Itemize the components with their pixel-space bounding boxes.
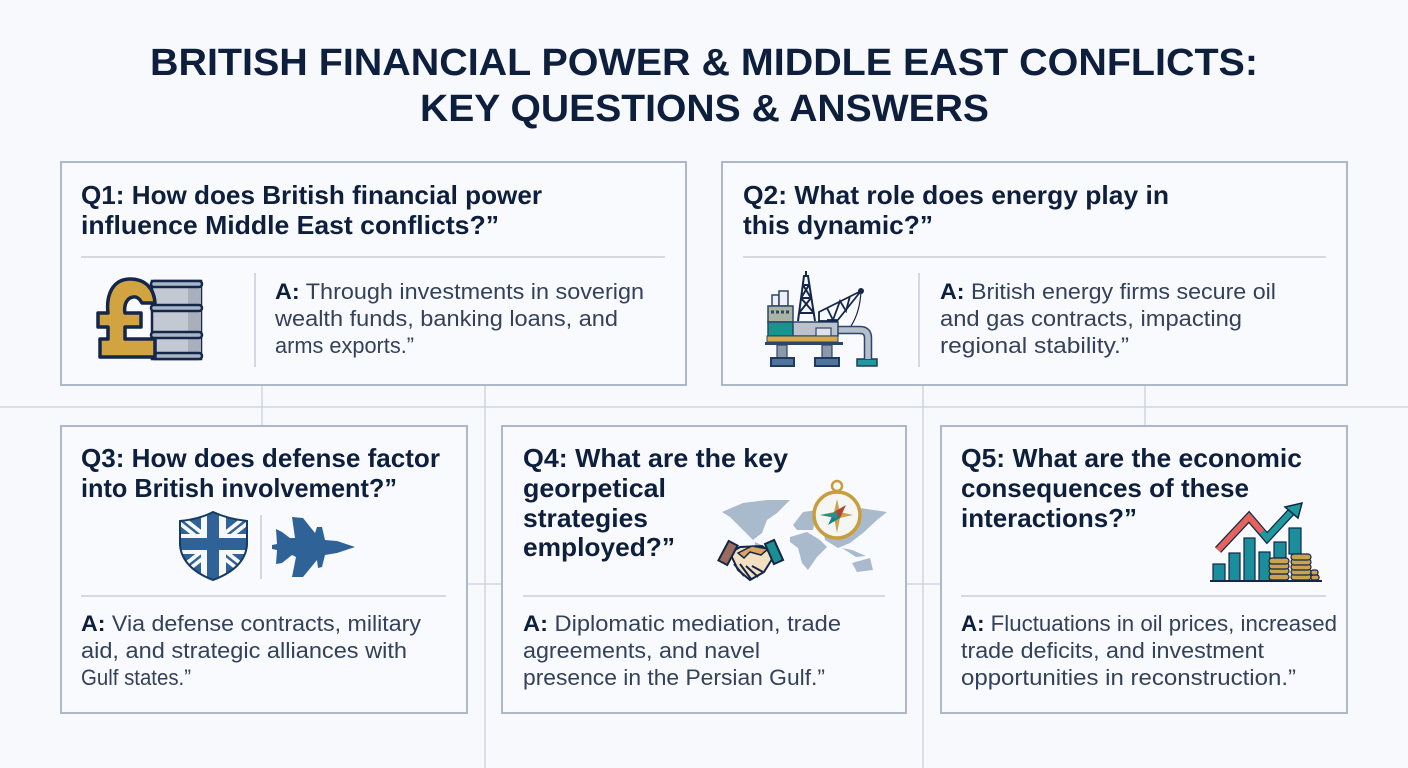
answer 4: A: Diplomatic mediation, trade	[523, 611, 841, 636]
answer 2: and gas contracts, impacting	[940, 306, 1242, 331]
question 4: strategies	[523, 503, 648, 533]
answer 3	[81, 611, 422, 690]
panel: Q1	[61, 162, 686, 385]
icon: handshake	[718, 540, 783, 580]
answer 2: A: British energy firms secure oil	[940, 279, 1276, 304]
answer 1: arms exports.”	[275, 333, 414, 358]
panel: Q4	[502, 426, 906, 713]
question 4: employed?”	[523, 532, 675, 562]
answer 1: A: Through investments in soverign	[275, 279, 644, 304]
question 5: interactions?”	[961, 503, 1137, 533]
icon: growth chart and coins	[1210, 503, 1322, 581]
question 4	[523, 443, 789, 562]
answer 3: Gulf states.”	[81, 665, 191, 690]
answer 4	[523, 611, 841, 690]
question 2	[743, 180, 1169, 240]
question 4: Q4: What are the key	[523, 443, 789, 473]
answer 4: agreements, and navel	[523, 638, 760, 663]
answer 2: regional stability.”	[940, 333, 1129, 358]
icon: union jack shield	[178, 510, 250, 582]
question 4: georpetical	[523, 473, 666, 503]
answer 5: opportunities in reconstruction.”	[961, 665, 1296, 690]
question 3: Q3: How does defense factor	[81, 443, 440, 473]
answer 1: wealth funds, banking loans, and	[274, 306, 618, 331]
title: KEY QUESTIONS & ANSWERS	[420, 88, 989, 130]
answer 1	[274, 279, 644, 358]
question 3: into British involvement?”	[81, 473, 397, 503]
question 2: Q2: What role does energy play in	[743, 180, 1169, 210]
panel: Q3	[61, 426, 467, 713]
answer 5: trade deficits, and investment	[961, 638, 1265, 663]
answer 3: A: Via defense contracts, military	[81, 611, 422, 636]
panel: Q2	[722, 162, 1347, 385]
answer 2	[940, 279, 1276, 358]
title	[150, 42, 1258, 130]
answer 5: A: Fluctuations in oil prices, increased	[961, 611, 1337, 636]
icon: pound sign and oil barrel	[98, 279, 202, 359]
answer 5	[961, 611, 1337, 690]
panel: Q5	[941, 426, 1347, 713]
answer 4: presence in the Persian Gulf.”	[523, 665, 825, 690]
question 3	[81, 443, 440, 503]
icon: offshore oil platform	[765, 271, 877, 366]
question 5: Q5: What are the economic	[961, 443, 1302, 473]
answer 3: aid, and strategic alliances with	[81, 638, 407, 663]
title: BRITISH FINANCIAL POWER & MIDDLE EAST CONFLICTS:	[150, 42, 1258, 84]
question 2: this dynamic?”	[743, 210, 933, 240]
icon: compass	[814, 481, 860, 538]
question 1: influence Middle East conflicts?”	[81, 210, 499, 240]
question 5: consequences of these	[961, 473, 1249, 503]
question 1: Q1: How does British financial power	[81, 180, 542, 210]
icon: world map	[722, 500, 887, 572]
question 1	[81, 180, 542, 240]
icon: fighter jet	[272, 517, 355, 577]
question 5	[961, 443, 1302, 533]
